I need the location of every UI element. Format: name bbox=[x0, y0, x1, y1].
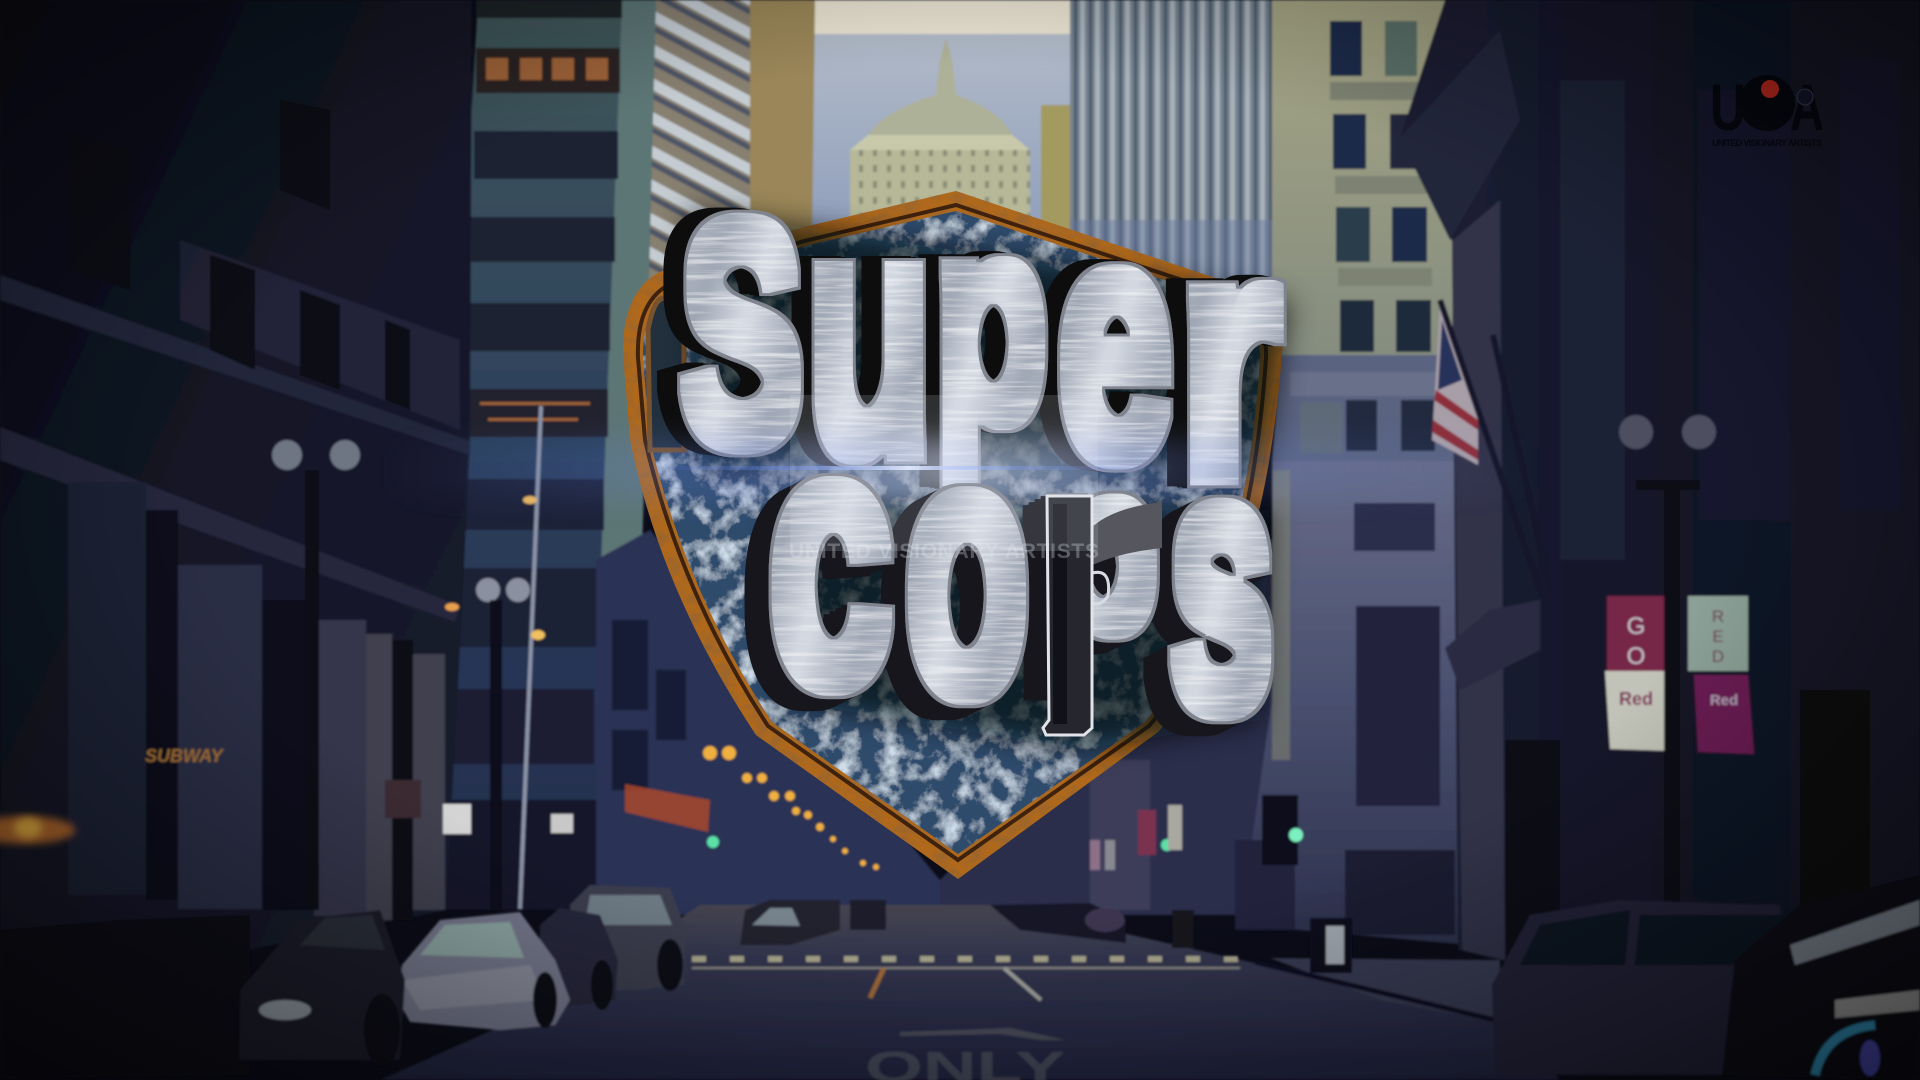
shield outer rusted frame bbox=[623, 191, 1283, 879]
title: Cops bbox=[768, 354, 1274, 786]
shield inner stone plate bbox=[643, 211, 1260, 854]
distant parked cars bbox=[740, 900, 1126, 945]
logo: United Visionary Artists bbox=[1710, 70, 1824, 148]
logo: United Visionary Artists: U bbox=[1710, 70, 1746, 144]
street banners: Red bbox=[1710, 692, 1738, 709]
street banners: G bbox=[1627, 613, 1645, 640]
shadows under lettering bbox=[690, 210, 1290, 750]
parked cars, left bbox=[0, 885, 686, 1078]
street banners: R bbox=[1712, 607, 1724, 626]
logo: United Visionary Artists: A bbox=[1790, 70, 1824, 144]
lens flare band bbox=[380, 440, 1540, 498]
street banners: D bbox=[1712, 647, 1724, 666]
logo: United Visionary Artists: UNITED VISIONARY ARTISTS bbox=[1712, 138, 1822, 148]
title: Super bbox=[680, 145, 1282, 548]
street banners: O bbox=[1627, 643, 1645, 670]
mid building with banded floors bbox=[436, 0, 622, 910]
street lamps, left bbox=[0, 406, 573, 910]
watermark: ghost logo overlay bbox=[789, 395, 1099, 563]
shield inner dark bevel bbox=[638, 205, 1266, 860]
American flag bbox=[1432, 300, 1550, 590]
letter p: p bbox=[934, 164, 1048, 478]
shield left arch detail bbox=[648, 298, 684, 450]
watermark: ghost logo overlay: UNITED VISIONARY ARTISTS bbox=[789, 540, 1099, 563]
letter s: s bbox=[1169, 375, 1274, 786]
street banners: Red bbox=[1619, 689, 1653, 709]
letter u: u bbox=[807, 145, 932, 524]
parked cars, right bbox=[1172, 875, 1920, 1080]
striped skyscraper, right of centre bbox=[1070, 0, 1275, 300]
sky bbox=[790, 0, 1090, 300]
shield emblem bbox=[623, 191, 1283, 879]
lower buildings converging to the vanishing point bbox=[596, 520, 1290, 915]
domed tower in the distance bbox=[850, 38, 1071, 250]
distant banners bbox=[1090, 805, 1182, 870]
traffic lights bbox=[707, 795, 1303, 865]
street banners: E bbox=[1712, 627, 1724, 646]
letter p: p bbox=[1042, 419, 1160, 678]
street lamp post, right bbox=[1619, 415, 1716, 960]
icon: pistol forming the letter p stem bbox=[1043, 496, 1162, 735]
street lamps, left: SUBWAY bbox=[145, 746, 225, 766]
stone cornice and lower body bbox=[1235, 355, 1470, 945]
dark stone building, left bbox=[0, 0, 472, 1000]
dark stone building, right bbox=[1400, 0, 1920, 1000]
letter r: r bbox=[1177, 166, 1282, 548]
letter e: e bbox=[1057, 152, 1173, 528]
letter S: S bbox=[680, 159, 803, 508]
road surface bbox=[380, 905, 1560, 1080]
letter c: c bbox=[768, 354, 893, 759]
orange street lights receding bbox=[703, 746, 879, 870]
striped skyscraper, left of centre bbox=[600, 0, 815, 560]
street banners bbox=[1605, 596, 1754, 754]
beige tower with windows bbox=[1272, 0, 1462, 360]
letter o: o bbox=[905, 366, 1029, 769]
